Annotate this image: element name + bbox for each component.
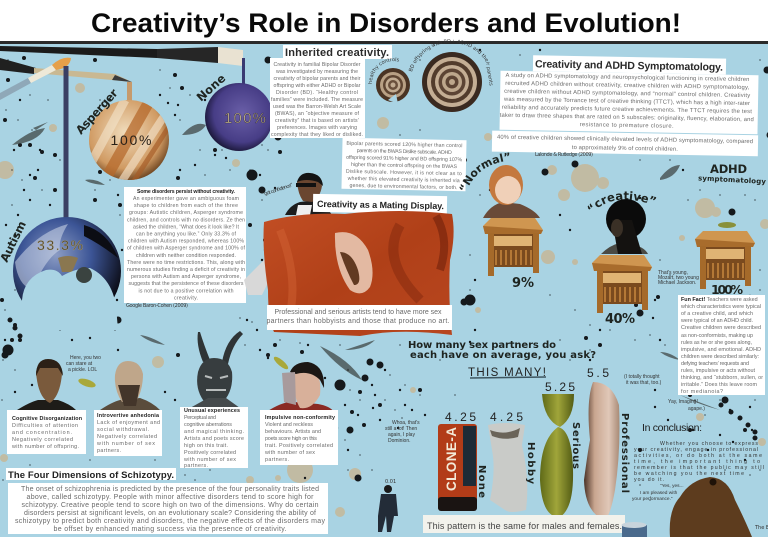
panel: schizotypy text: disorders persist at significant levels, on an evolutionary scale? Considering the ability of xyxy=(24,510,316,517)
panel: fun fact xyxy=(678,295,765,395)
stained spiral object xyxy=(76,267,92,283)
panel: inherited creativity text: Disorder (BD). “Healthy control xyxy=(276,90,358,96)
panel: disorders persist: children with Autism responded, whereas 100% xyxy=(128,239,244,245)
panel: disorders persist: Some disorders persist without creativity. xyxy=(137,189,236,195)
hanging strings xyxy=(64,58,245,219)
panel: unusual experiences: Unusual experiences xyxy=(184,408,240,414)
handwritten note: thought it was that: it was that, too.) xyxy=(626,380,662,386)
icon: can xyxy=(622,522,647,537)
planet: Autism (Earth) xyxy=(13,217,121,330)
icon: pickle xyxy=(77,377,97,389)
panel: schizotypy text xyxy=(8,483,328,534)
source note: Google Baron-Cohen (2009) xyxy=(126,303,188,309)
handwritten note: performance xyxy=(632,483,684,502)
panel: impulsive non-conformity: partners. xyxy=(265,457,289,463)
source note: Lalonde & Rutledge (2009) xyxy=(535,152,593,158)
panel: fun fact: Fun Fact! Teachers were asked xyxy=(681,297,758,303)
handwritten paragraph: conclusion: time, the important thing to xyxy=(634,459,760,465)
panel: disorders persist: asked the children, “What does it look like? It xyxy=(133,224,240,230)
panel: disorders persist: groups: Autistic children, Asperger syndrome xyxy=(129,210,243,216)
handwritten note: Dominion: again, I play xyxy=(388,432,415,438)
panel: ADHD study text: A study on ADHD symptomatology and neuropsychological functioning in creative children xyxy=(505,73,749,83)
handwritten paragraph: conclusion: your creativity, engage in professional xyxy=(634,447,758,453)
bar: pickle xyxy=(540,394,574,517)
toad eye xyxy=(710,478,716,486)
heading: how many sex partners: each have on average, you ask? xyxy=(410,350,596,361)
ash detail xyxy=(490,428,520,439)
title band xyxy=(0,0,768,42)
panel: unusual experiences: partners. xyxy=(184,463,208,469)
paintbrush: orange-tipped brush xyxy=(0,58,71,100)
curved label: BD offspring: BD offspring with BD+ ADHD and their parents xyxy=(408,39,493,86)
value: 4.25 hobby: 4.25 xyxy=(490,410,523,424)
panel: unusual experiences xyxy=(180,407,248,469)
panel: fun fact: Creative children were described xyxy=(681,325,761,331)
panel: schizotypy text: schizotypy. Creative people tend to score high on two of the dimensions. Why do certain xyxy=(22,502,319,509)
panel: mating display caption: Professional and serious artists tend to have more sex xyxy=(274,309,442,316)
icon: pickle xyxy=(718,222,736,228)
heading: THIS MANY: THIS MANY! xyxy=(468,367,546,379)
label: ADHD symptomatology: ADHD xyxy=(710,162,747,176)
planet value: 33.3% xyxy=(37,237,83,253)
axis label: Serious: Serious xyxy=(570,422,581,469)
paintbrush: long black brush xyxy=(0,46,243,66)
panel: unusual experiences: and magical thinking. xyxy=(184,429,244,435)
panel: schizotypy text: schizotypy to predict both creativity and disorders, the negative effects of the disorders may xyxy=(15,518,325,525)
panel: disorders persist: children with neither condition responded. xyxy=(136,253,236,259)
heading: In conclusion: In conclusion: xyxy=(642,422,702,434)
portrait: introvertive anhedonia xyxy=(100,361,160,410)
panel: inherited creativity text: Creativity in familial Bipolar Disorder xyxy=(274,62,361,68)
value: 5.25: 5.25 xyxy=(545,380,575,394)
handwritten note: pickle xyxy=(66,355,101,373)
curved label: healthy controls: healthy controls xyxy=(368,57,399,84)
panel: introvertive anhedonia: partners. xyxy=(97,448,121,454)
heading: Inherited creativity: Inherited creativity. xyxy=(285,47,389,59)
table: creative xyxy=(592,255,652,313)
axis label: Hobby: Hobby xyxy=(525,442,536,484)
label: creative: “creative” xyxy=(588,191,656,210)
panel: fun fact: which characteristics were typical xyxy=(680,304,761,310)
panel: inherited creativity results xyxy=(341,138,467,191)
panel: disorders persist: is not due to a positive correlation with xyxy=(138,288,234,294)
panel: unusual experiences: Positively correlated xyxy=(184,450,236,456)
panel: ADHD study text: reliability and accurately predicts future creative achievements. The TTCT requires the test xyxy=(502,105,752,115)
panel: inherited creativity results: genes, due to environmental factors, or both. xyxy=(349,183,458,191)
panel: mating display caption xyxy=(266,305,452,330)
panel: ADHD result: 40% of creative children showed clinically elevated levels of ADHD symptomatology, compared xyxy=(497,135,753,145)
panel: inherited creativity text: (BWAS), an “objective measure of xyxy=(275,111,360,117)
panel: ADHD study text: resistance to premature closure. xyxy=(580,122,674,130)
panel: fun fact: children were described similarly: xyxy=(681,354,759,360)
handwritten paragraph: conclusion: remember is that the public may still xyxy=(634,465,764,471)
panel: introvertive anhedonia: Introvertive anhedonia xyxy=(97,413,160,419)
heading: how many sex partners xyxy=(408,340,596,361)
panel: fun fact: defying teachers’ requests and xyxy=(681,361,749,367)
handwritten note: Michael Jackson: Michael Jackson. xyxy=(658,280,696,286)
handwritten paragraph: conclusion: you do it. xyxy=(634,477,664,483)
handwritten paragraph: conclusion: Whether you choose to express xyxy=(660,441,758,447)
figure: sitting man xyxy=(378,479,398,532)
handwritten note: performance: your performance.” xyxy=(632,496,673,502)
paintbrush: tan round brush xyxy=(0,58,132,82)
figure: sitting man: 0.01 xyxy=(385,479,396,485)
panel: introvertive anhedonia xyxy=(94,410,162,456)
panel: introvertive anhedonia: Negatively correlated xyxy=(97,434,157,440)
panel: disorders persist: of children with Asperger syndrome and 100% of xyxy=(127,246,246,252)
panel: impulsive non-conformity: trait. Positively correlated xyxy=(265,443,333,449)
panel: inherited creativity results: Bipolar parents scored 120% higher than control xyxy=(346,141,462,149)
icon: ear xyxy=(335,232,373,293)
planet value: 100% xyxy=(110,132,152,148)
panel: inherited creativity text: used was the Barron-Welsh Art Scale xyxy=(273,104,361,110)
panel: fun fact: thinking, and “stubborn, sullen, or xyxy=(681,375,763,381)
panel: cognitive disorganization: with number of offspring. xyxy=(11,444,79,450)
panel: inherited creativity results: parents on the BWAS Dislike subscale. ADHD xyxy=(357,148,452,156)
shell: healthy controls xyxy=(376,68,410,104)
panel: fun fact: as non-conformists, making up xyxy=(681,333,753,339)
heading: Creativity as a Mating Display: Creativity as a Mating Display. xyxy=(317,199,444,211)
panel: inherited creativity text xyxy=(270,58,365,138)
panel: disorders persist: There were no time restrictions. This, along with xyxy=(127,260,245,266)
axis label: Professional: Professional xyxy=(619,413,630,493)
handwritten note: thought it was that xyxy=(624,374,662,386)
panel: unusual experiences: Artists and poets score xyxy=(184,436,244,442)
bar: professional xyxy=(584,382,620,520)
brush strokes / streaks xyxy=(12,122,720,410)
panel: unusual experiences: with number of sex xyxy=(183,457,236,463)
panel: disorders persist xyxy=(124,187,246,303)
handwritten note: pickle: Here, you two xyxy=(70,355,101,361)
handwritten note: got confidence: “got confidence” xyxy=(262,182,294,198)
panel: ADHD result: to approximately 9% of control children. xyxy=(572,145,678,153)
label: Asperger: Asperger xyxy=(73,86,121,137)
panel: impulsive non-conformity: Impulsive non-conformity xyxy=(265,415,335,421)
title band: Creativity’s Role in Disorders and Evolution! xyxy=(91,8,681,38)
heading: The Four Dimensions of Schizotypy: The Four Dimensions of Schizotypy. xyxy=(8,470,174,481)
handwritten note: agape xyxy=(668,399,705,412)
portrait: cognitive disorganization xyxy=(17,359,76,410)
label: None: None xyxy=(194,71,228,104)
bar: Clone-A can xyxy=(438,424,477,511)
panel: impulsive non-conformity: behaviours. Artists and xyxy=(265,429,321,435)
value: 5.5: 5.5 xyxy=(587,366,609,380)
handwritten note: Dominion: Dominion. xyxy=(388,438,411,444)
handwritten note: thought it was that: (I totally thought xyxy=(624,374,660,380)
table: normal xyxy=(483,218,543,276)
panel: impulsive non-conformity: Violent and reckless xyxy=(265,422,313,428)
value: 9%: 9% xyxy=(512,276,534,291)
handwritten note: pickle: a pickle. LOL xyxy=(68,367,97,373)
heading: Creativity and ADHD Symptomatology: Creativity and ADHD Symptomatology. xyxy=(535,58,723,74)
panel: ADHD study text: creative children without ADHD symptomatology, and “normal” control children. Creativity xyxy=(504,89,750,99)
heading: Creativity as a Mating Display xyxy=(313,194,447,214)
panel: ADHD result xyxy=(492,131,758,156)
panel: impulsive non-conformity: with number of sex xyxy=(264,450,315,456)
panel: cognitive disorganization: Cognitive Disorganization xyxy=(12,416,82,422)
figure: red cloth with ear xyxy=(264,211,454,336)
panel: mating display caption: partners than hobbyists and those that produce no art. xyxy=(266,318,450,325)
handwritten note: Michael Jackson: That's young, xyxy=(658,270,688,276)
handwritten note: Dominion: still a lot! Then xyxy=(385,426,417,432)
panel: schizotypy text: The onset of schizophrenia is predicted by the presence of the four personality traits listed xyxy=(21,486,319,493)
panel: disorders persist: An experimenter gave an ambiguous foam xyxy=(133,196,239,202)
handwritten note: Michael Jackson xyxy=(658,270,699,286)
panel: inherited creativity text: creativity of bipolar parents and their xyxy=(274,76,361,82)
panel: fun fact: of a creative child, and which xyxy=(681,311,753,317)
panel: introvertive anhedonia: Lack of enjoyment and xyxy=(97,420,160,426)
figure: man with sunglasses xyxy=(285,173,332,215)
panel: unusual experiences: high on this trait. xyxy=(184,443,228,449)
value: 4.25 none: 4.25 xyxy=(445,410,476,424)
figure: white glove xyxy=(244,252,280,295)
panel: disorders persist: numerous studies finding a deficit of creativity in xyxy=(127,267,245,273)
handwritten note: performance: “Yes, yes... xyxy=(660,483,684,489)
panel: disorders persist: children, and controls with no disorders. Ze then xyxy=(127,217,245,223)
panel: disorders persist: can be anything you like.” Only 33.3% of xyxy=(136,232,237,238)
table: ADHD xyxy=(695,231,755,289)
panel: fun fact: impulsive, and emotional. ADHD xyxy=(681,347,761,353)
figure: dark silhouette xyxy=(601,199,648,254)
planet: Asperger (Jupiter) xyxy=(89,100,170,184)
axis label: None: None xyxy=(476,465,487,498)
panel: disorders persist: suggests that the persistence of these disorders xyxy=(128,281,244,287)
handwritten note: Michael Jackson: Mozart, two young xyxy=(658,275,699,281)
handwritten paragraph: conclusion: be watching you the next time xyxy=(634,471,744,477)
panel: unusual experiences: cognitive aberrations xyxy=(184,422,232,428)
panel: cognitive disorganization: and concentration. xyxy=(12,430,72,436)
panel: ADHD study text xyxy=(500,71,759,134)
panel: cognitive disorganization: Difficulties of attention xyxy=(12,423,78,429)
panel: introvertive anhedonia: social withdrawal. xyxy=(97,427,149,433)
panel: impulsive non-conformity xyxy=(260,410,338,465)
bar: cigarette ash xyxy=(488,423,527,512)
panel: ADHD study text: was measured by the Torrance test of creative thinking (TTCT), which has a high inter-rater xyxy=(503,97,750,107)
handwritten note: Dominion: Whoa, that's xyxy=(392,420,420,426)
panel: inherited creativity results: higher than the control offspring on the BWAS xyxy=(351,162,458,170)
panel: schizotypy text: above, called schizotypy. People with minor affective disorders tend to score high for xyxy=(26,494,314,501)
handwritten note: pickle: can stare at xyxy=(66,361,93,367)
heading: how many sex partners: How many sex partners do xyxy=(408,340,556,351)
handwritten note: agape: Yay, Imaging! xyxy=(668,399,698,405)
label: ADHD symptomatology xyxy=(698,162,767,186)
handwritten paragraph: conclusion xyxy=(634,441,764,483)
panel: fun fact: were typical of an ADHD child. xyxy=(680,318,753,324)
panel: inherited creativity text: families” were included. The measure xyxy=(271,97,363,103)
panel: pattern note xyxy=(423,515,625,533)
shell: BD offspring xyxy=(422,52,482,112)
panel: fun fact: for medianoia? xyxy=(681,389,723,395)
portrait: Frank the rabbit xyxy=(190,331,243,408)
panel: inherited creativity text: preferences. Images with varying xyxy=(277,125,357,131)
figure: toad xyxy=(670,477,752,537)
panel: inherited creativity text: creativity” that is based on artists’ xyxy=(275,118,359,124)
panel: introvertive anhedonia: with number of sex xyxy=(96,441,155,447)
panel: inherited creativity results: offspring scored 91% higher and BD offspring 107% xyxy=(346,155,463,163)
panel: disorders persist: persons with Autism and Asperger syndrome, xyxy=(131,274,241,280)
panel: inherited creativity text: was investigated by measuring the xyxy=(276,69,358,75)
panel: disorders persist: shape to children from each of the three xyxy=(134,203,238,209)
planet value: 100% xyxy=(224,110,266,127)
panel: disorders persist: creativity. xyxy=(174,295,198,301)
figure: child xyxy=(483,165,540,218)
value: 40%: 40% xyxy=(605,312,635,327)
panel: cognitive disorganization: Negatively correlated xyxy=(12,437,73,443)
panel: impulsive non-conformity: poets score high on this xyxy=(265,436,317,442)
panel: fun fact: rules, impulsive or acts without xyxy=(681,368,756,374)
panel: inherited creativity results: Dislike subscale. However, it is not clear as to xyxy=(346,169,462,177)
panel: inherited creativity text: complexity that they liked or disliked. xyxy=(271,132,363,138)
planet: None xyxy=(205,83,273,151)
panel: ADHD study text: taker to draw three shapes that are rated on 5 subscales: originality, fluency, elaboration, and xyxy=(500,113,754,123)
handwritten paragraph: conclusion: activities, or do both at the same xyxy=(634,453,762,459)
panel: fun fact: irritable.” Does this leave room xyxy=(681,382,758,388)
value: 100%: 100% xyxy=(711,282,743,297)
panel: fun fact: rules as he or she goes along, xyxy=(681,340,752,346)
panel: unusual experiences: Perceptual and xyxy=(184,415,216,421)
panel: pattern note: This pattern is the same for males and females. xyxy=(427,521,622,531)
label: Normal: “Normal” xyxy=(460,152,510,190)
label: ADHD symptomatology: symptomatology xyxy=(698,174,767,186)
panel: inherited creativity text: offspring with either ADHD or Bipolar xyxy=(274,83,361,89)
icon: pickle xyxy=(272,355,290,371)
bar: Clone-A can: CLONE-A xyxy=(444,427,459,491)
panel: cognitive disorganization xyxy=(7,410,86,454)
handwritten note: Dominion xyxy=(385,420,420,444)
panel: inherited creativity results: whether this elevated creativity is inherited via xyxy=(348,176,460,184)
panel: schizotypy text: be offset by enhanced mating success via the presence of creativity. xyxy=(54,526,287,533)
handwritten note: agape: agape.) xyxy=(688,406,705,412)
handwritten note: performance: I am pleased with xyxy=(640,490,678,496)
portrait: impulsive non-conformity xyxy=(266,362,334,412)
panel: ADHD study text: recruited ADHD children without creativity, creative children with ADHD symptomatology, xyxy=(505,81,750,91)
